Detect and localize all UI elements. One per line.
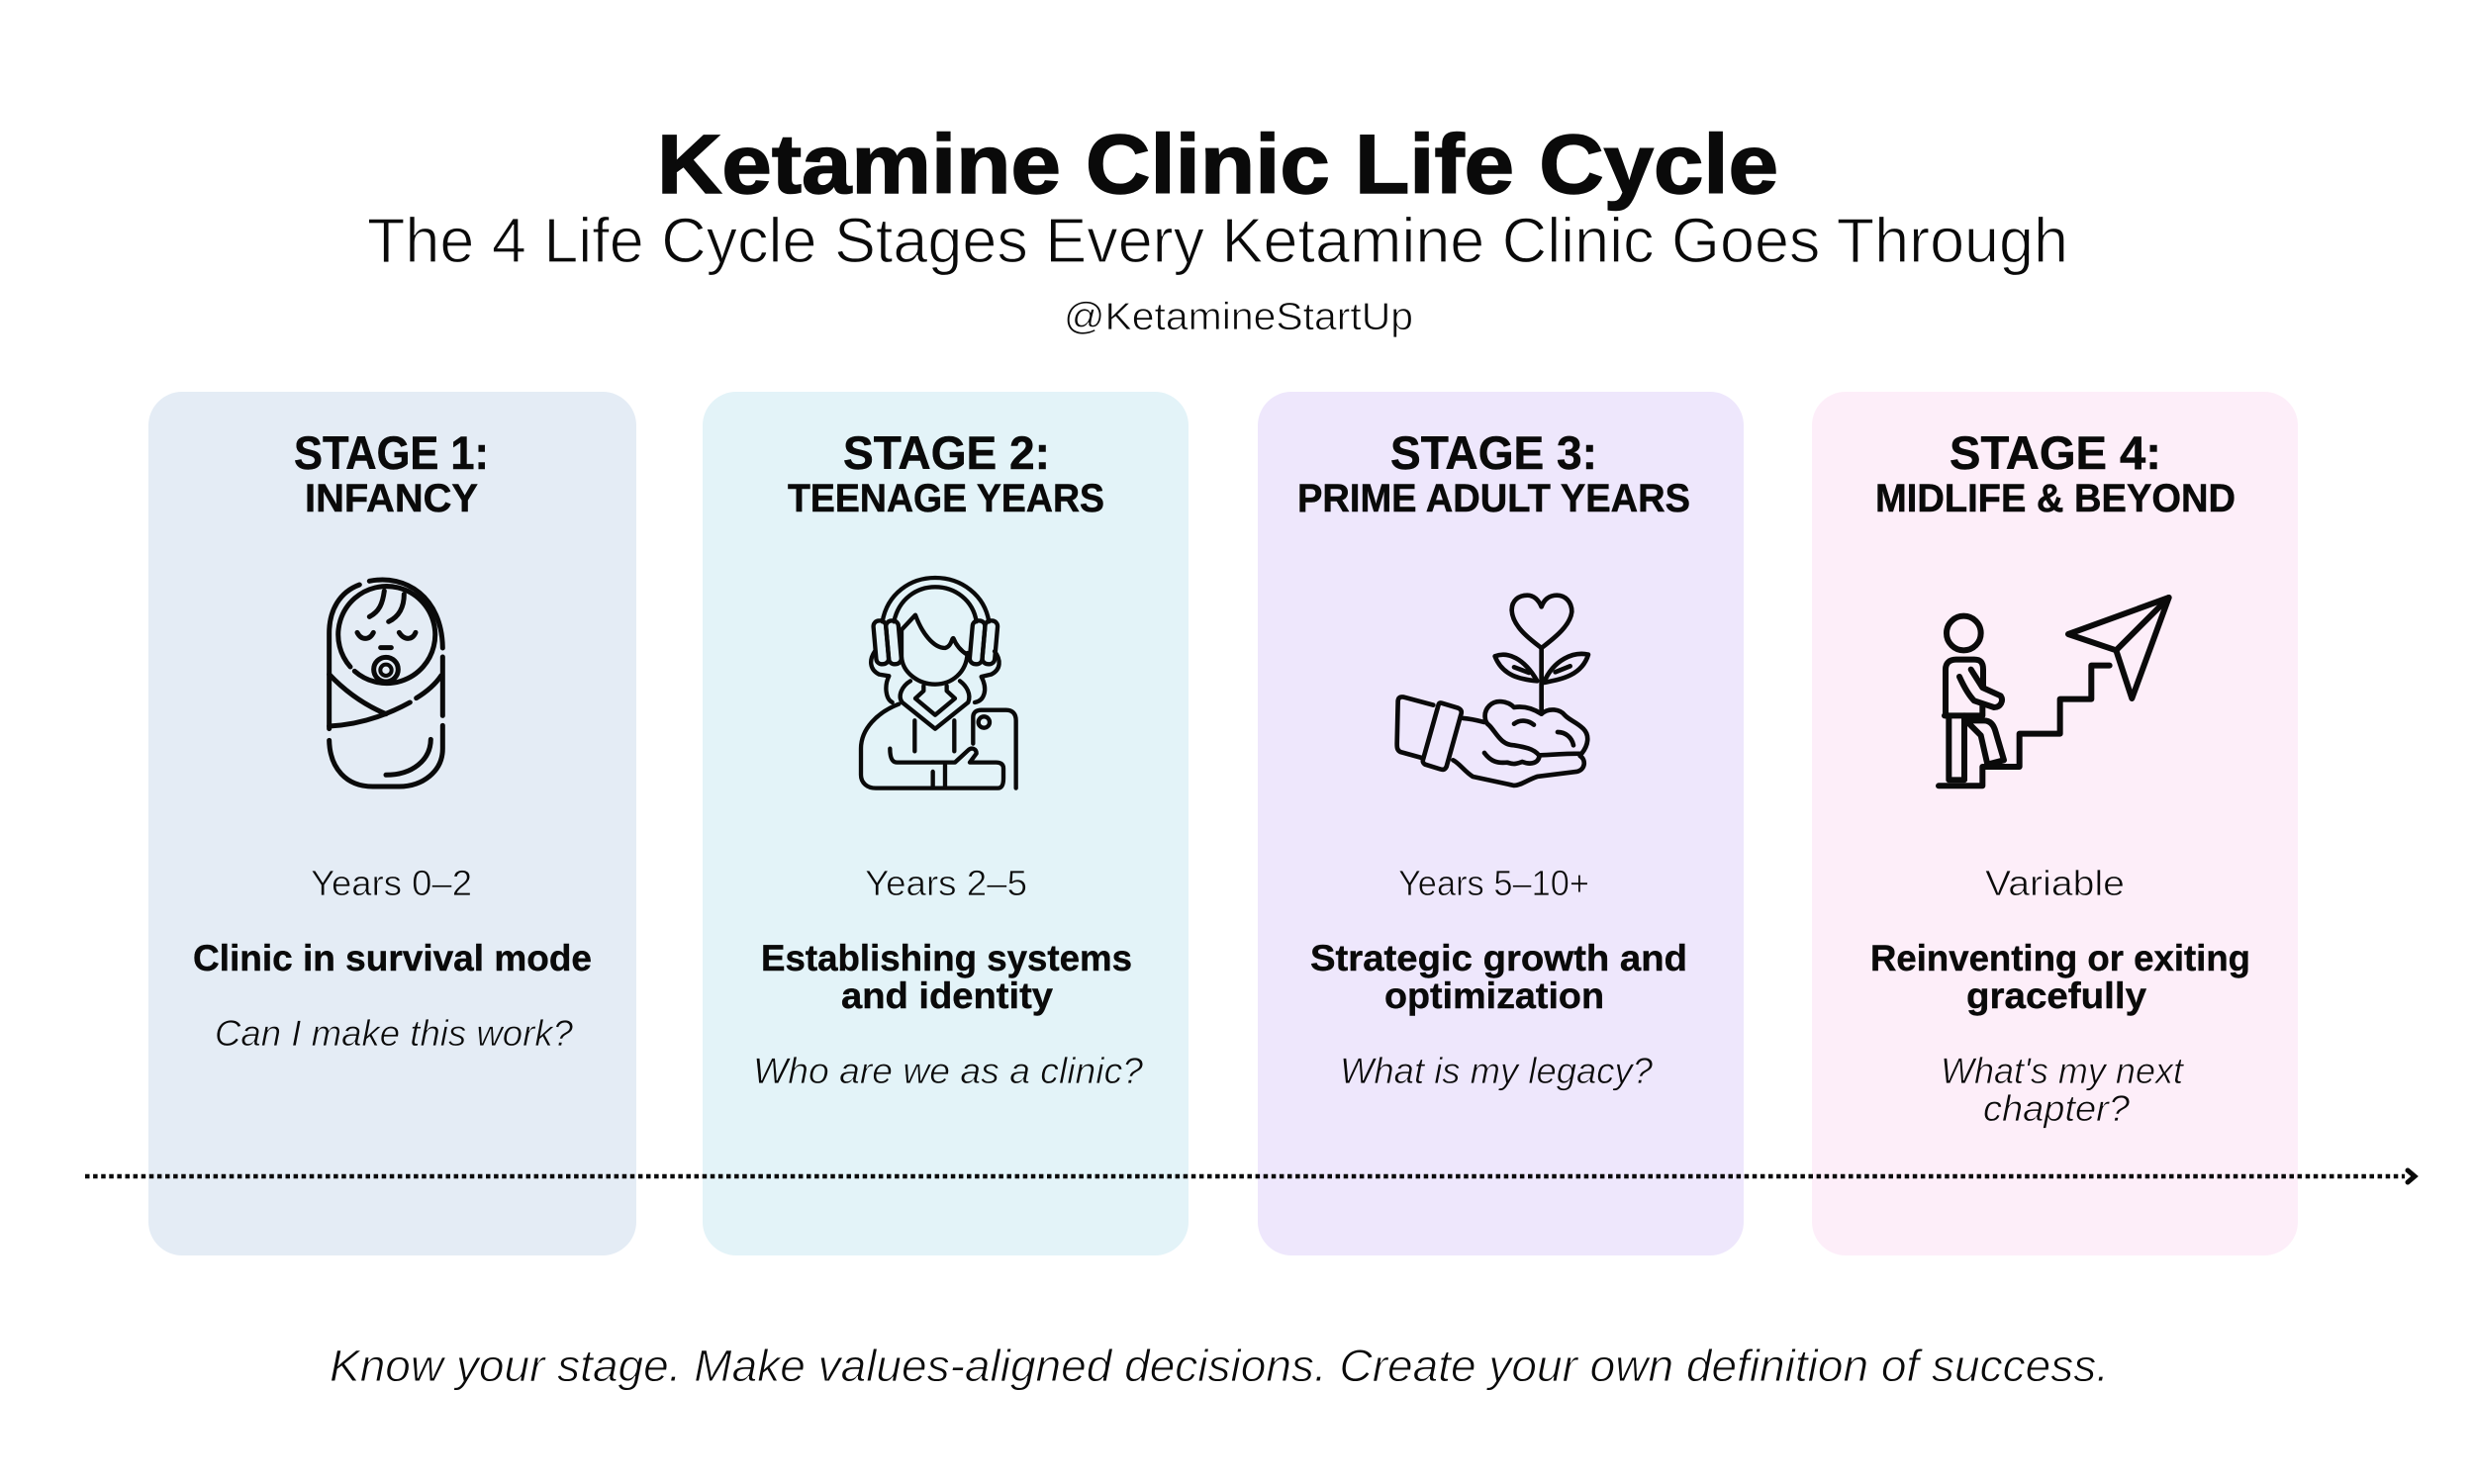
stage 4 description xyxy=(1870,938,2250,1016)
stage 2 name: TEENAGE YEARS xyxy=(788,477,1104,520)
stage 3 description: optimization xyxy=(1384,975,1604,1016)
stage 4 question: What's my next xyxy=(1941,1051,2185,1091)
icon: person climbing stairs toward paper plane xyxy=(1939,598,2169,786)
stage 1 question: Can I make this work? xyxy=(215,1013,573,1054)
title: Ketamine Clinic Life Cycle xyxy=(657,118,1778,211)
stage 4 years: Variable xyxy=(1985,863,2125,903)
stage 4 name: MIDLIFE & BEYOND xyxy=(1875,477,2236,520)
social handle: @KetamineStartUp xyxy=(1064,296,1413,338)
stage 4 question: chapter? xyxy=(1983,1088,2130,1129)
stage 3 description xyxy=(1310,938,1687,1016)
stage 4 description: Reinventing or exiting xyxy=(1870,938,2250,978)
stage 3 description: Strategic growth and xyxy=(1310,938,1687,978)
stage 3 name: PRIME ADULT YEARS xyxy=(1297,477,1690,520)
icon: hand holding heart plant xyxy=(1397,596,1588,786)
stage 1 description: Clinic in survival mode xyxy=(193,938,592,978)
stage 2 question: Who are we as a clinic? xyxy=(753,1051,1143,1091)
panel: stage 4 midlife and beyond xyxy=(1812,392,2298,1255)
stage 3 question: What is my legacy? xyxy=(1340,1051,1653,1091)
stage 4 description: gracefully xyxy=(1966,975,2146,1016)
subtitle: The 4 Life Cycle Stages Every Ketamine Clinic Goes Through xyxy=(367,205,2068,276)
stage 2 description: and identity xyxy=(841,975,1053,1016)
stage 1 heading: STAGE 1: xyxy=(294,426,489,479)
stage 2 description: Establishing systems xyxy=(761,938,1132,978)
stage 1 name: INFANCY xyxy=(305,477,478,520)
icon: swaddled baby xyxy=(330,580,442,787)
stage 3 heading: STAGE 3: xyxy=(1390,426,1597,479)
stage 2 description xyxy=(761,938,1132,1016)
stage 2 years: Years 2–5 xyxy=(865,863,1027,903)
footer tagline: Know your stage. Make values-aligned decisions. Create your own definition of success. xyxy=(330,1341,2109,1391)
icon: teen with headphones and phone xyxy=(861,578,1016,788)
panel: stage 3 prime adult years xyxy=(1258,392,1744,1255)
stage 1 years: Years 0–2 xyxy=(311,863,472,903)
stage 4 heading: STAGE 4: xyxy=(1950,426,2161,479)
arrow: dotted timeline xyxy=(85,1170,2415,1182)
stage 4 question xyxy=(1941,1051,2185,1129)
stage 3 years: Years 5–10+ xyxy=(1398,863,1589,903)
panel: stage 1 infancy xyxy=(148,392,636,1255)
stage 2 heading: STAGE 2: xyxy=(843,426,1050,479)
panel: stage 2 teenage years xyxy=(703,392,1189,1255)
